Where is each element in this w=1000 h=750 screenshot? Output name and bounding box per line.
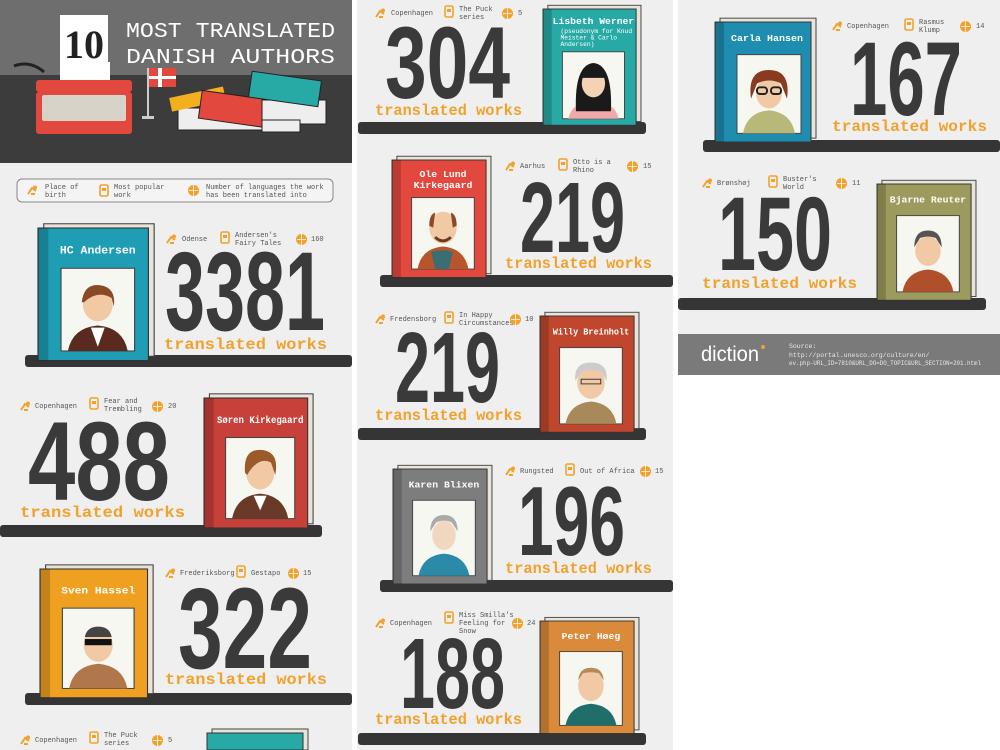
entry partial: Lisbeth Werner (col 1 bottom): Copenhagen xyxy=(35,737,77,745)
entry partial: Lisbeth Werner (col 1 bottom) xyxy=(21,729,308,750)
entry: Ole Lund Kirkegaard: 219 xyxy=(520,162,625,274)
entry: Søren Kierkegaard: Trembling xyxy=(104,406,142,414)
entry: Peter Høeg: 188 xyxy=(400,618,505,730)
entry: Sven Hassel: translated works xyxy=(165,671,327,689)
entry: Willy Breinholt: 10 xyxy=(525,316,533,324)
footer xyxy=(678,334,1000,375)
entry: Sven Hassel xyxy=(40,565,327,698)
entry: Lisbeth Werner: Copenhagen xyxy=(391,10,433,18)
entry: Karen Blixen: translated works xyxy=(505,560,652,578)
entry: Ole Lund Kirkegaard xyxy=(392,156,652,278)
entry: HC Andersen: 3381 xyxy=(165,229,325,354)
book: Bjarne Reuter: Bjarne Reuter xyxy=(890,195,966,206)
entry: Ole Lund Kirkegaard: translated works xyxy=(505,255,652,273)
entry: Lisbeth Werner: series xyxy=(459,14,484,22)
logo: diction: diction xyxy=(701,343,759,366)
entry: Peter Høeg: Snow xyxy=(459,628,477,636)
legend: Most popular xyxy=(114,184,164,192)
book: Lisbeth Werner: Meister & Carlo xyxy=(560,35,617,42)
entry: Willy Breinholt: In Happy xyxy=(459,312,493,320)
entry: Bjarne Reuter: 150 xyxy=(718,176,832,293)
book: Søren Kierkegaard: Søren Kirkegaard xyxy=(217,415,303,427)
legend xyxy=(17,179,333,202)
title: DANISH AUTHORS xyxy=(126,47,335,70)
book: Sven Hassel xyxy=(40,565,153,698)
book: Lisbeth Werner xyxy=(543,5,641,125)
entry: HC Andersen: Fairy Tales xyxy=(235,240,281,248)
entry: Karen Blixen: 196 xyxy=(518,466,625,576)
book: Peter Høeg: Peter Høeg xyxy=(562,631,621,642)
title: MOST TRANSLATED xyxy=(126,21,335,44)
entry: HC Andersen: translated works xyxy=(164,336,327,354)
book: Ole Lund Kirkegaard xyxy=(392,156,491,278)
entry: Peter Høeg: translated works xyxy=(375,711,522,729)
book: Willy Breinholt: Willy Breinholt xyxy=(553,327,629,338)
entry: Søren Kierkegaard: Copenhagen xyxy=(35,403,77,411)
entry: Bjarne Reuter: 11 xyxy=(852,180,860,188)
entry: Willy Breinholt: Circumstances xyxy=(459,320,514,328)
entry: Sven Hassel: Frederiksborg xyxy=(180,570,235,578)
entry: Carla Hansen: Rasmus xyxy=(919,19,944,27)
entry: Ole Lund Kirkegaard: 15 xyxy=(643,163,651,171)
book: Søren Kierkegaard xyxy=(204,394,313,528)
entry: Carla Hansen: Klump xyxy=(919,27,940,35)
legend: Place of xyxy=(45,184,79,192)
typewriter xyxy=(14,62,132,134)
book: Sven Hassel: Sven Hassel xyxy=(61,586,136,598)
book: Karen Blixen xyxy=(393,465,492,584)
entry: Karen Blixen: Out of Africa xyxy=(580,468,635,476)
entry: Bjarne Reuter: Buster's xyxy=(783,176,817,184)
entry: Peter Høeg: 24 xyxy=(527,620,535,628)
book: HC Andersen: HC Andersen xyxy=(60,246,136,257)
book: Carla Hansen: Carla Hansen xyxy=(731,33,803,44)
entry: HC Andersen xyxy=(38,224,327,360)
entry: Ole Lund Kirkegaard: Rhino xyxy=(573,167,594,175)
book: Ole Lund Kirkegaard: Ole Lund xyxy=(419,169,467,180)
entry: Willy Breinholt: translated works xyxy=(375,407,522,425)
entry: Søren Kierkegaard xyxy=(20,394,313,528)
entry: Søren Kierkegaard: Fear and xyxy=(104,398,138,406)
book: HC Andersen xyxy=(38,224,154,360)
entry: Lisbeth Werner: The Puck xyxy=(459,6,493,14)
entry: Karen Blixen: 15 xyxy=(655,468,663,476)
number ten xyxy=(60,15,108,69)
entry: Sven Hassel: 15 xyxy=(303,570,311,578)
legend: birth xyxy=(45,192,66,200)
entry: Karen Blixen: Rungsted xyxy=(520,468,554,476)
legend: Number of languages the work xyxy=(206,184,324,192)
entry: HC Andersen: Odense xyxy=(182,236,207,244)
header banner xyxy=(0,0,352,163)
entry partial: Lisbeth Werner (col 1 bottom): series xyxy=(104,740,129,748)
book: Carla Hansen xyxy=(715,18,816,142)
entry: HC Andersen: 160 xyxy=(311,236,324,244)
entry: Willy Breinholt: 219 xyxy=(395,312,500,424)
entry: Peter Høeg: Copenhagen xyxy=(390,620,432,628)
book: Karen Blixen: Karen Blixen xyxy=(409,480,480,490)
entry: Ole Lund Kirkegaard: Otto is a xyxy=(573,159,611,167)
entry: Peter Høeg: Feeling for xyxy=(459,620,505,628)
entry: Lisbeth Werner: 304 xyxy=(385,6,510,120)
book: Lisbeth Werner: Andersen) xyxy=(560,41,594,48)
entry: Willy Breinholt: Fredensborg xyxy=(390,316,436,324)
book: Ole Lund Kirkegaard: Kirkegaard xyxy=(414,180,473,191)
entry: Bjarne Reuter: translated works xyxy=(702,275,857,293)
book: Willy Breinholt xyxy=(540,312,639,432)
sources: Source: xyxy=(789,343,816,350)
entry: Bjarne Reuter: World xyxy=(783,184,804,192)
entry: Willy Breinholt xyxy=(375,312,639,432)
entry: Søren Kierkegaard: translated works xyxy=(20,504,185,522)
sources xyxy=(789,343,981,367)
sources: http://portal.unesco.org/culture/en/ xyxy=(789,352,930,359)
entry: Bjarne Reuter: Brønshøj xyxy=(717,180,751,188)
entry: Bjarne Reuter xyxy=(702,176,976,300)
entry: Carla Hansen: Copenhagen xyxy=(847,23,889,31)
book: Lisbeth Werner: Lisbeth Werner xyxy=(553,16,634,27)
sources: ev.php-URL_ID=7810&URL_DO=DO_TOPIC&URL_SECTION=201.html xyxy=(789,360,981,367)
number ten: 10 xyxy=(64,22,104,67)
entry: Carla Hansen: 14 xyxy=(976,23,984,31)
book: Lisbeth Werner: (pseudonym for Knud xyxy=(560,28,632,35)
entry: Lisbeth Werner: translated works xyxy=(375,102,522,120)
entry: Sven Hassel: Gestapo xyxy=(251,570,280,578)
entry: Søren Kierkegaard: 488 xyxy=(28,399,170,524)
legend: work xyxy=(114,192,131,200)
flag xyxy=(142,68,176,119)
entry: Ole Lund Kirkegaard: Aarhus xyxy=(520,163,545,171)
book: Bjarne Reuter xyxy=(877,180,976,300)
entry: Karen Blixen xyxy=(393,464,663,584)
entry: Carla Hansen: translated works xyxy=(832,118,987,136)
entry: Peter Høeg: Miss Smilla's xyxy=(459,612,514,620)
entry: Lisbeth Werner: 5 xyxy=(518,10,522,18)
entry partial: Lisbeth Werner (col 1 bottom): 5 xyxy=(168,737,172,745)
entry: Sven Hassel: 322 xyxy=(178,565,312,693)
entry: Carla Hansen xyxy=(715,18,987,142)
book pile xyxy=(169,71,326,132)
book: Peter Høeg xyxy=(540,617,639,734)
entry: Lisbeth Werner xyxy=(375,5,641,125)
entry: Peter Høeg xyxy=(375,612,639,734)
title xyxy=(126,21,335,70)
legend: has been translated into xyxy=(206,192,307,200)
entry: HC Andersen: Andersen's xyxy=(235,232,277,240)
entry: Søren Kierkegaard: 20 xyxy=(168,403,176,411)
entry partial: Lisbeth Werner (col 1 bottom): The Puck xyxy=(104,732,138,740)
